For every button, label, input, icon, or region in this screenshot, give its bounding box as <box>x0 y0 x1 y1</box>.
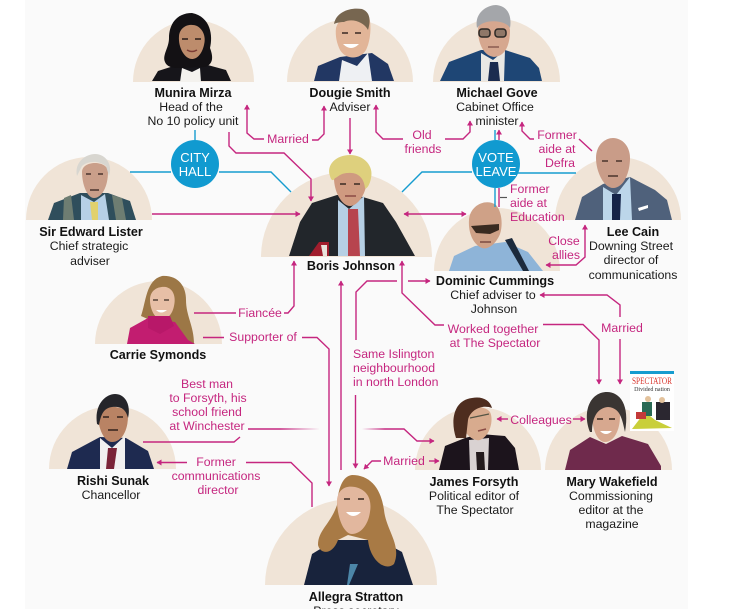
portrait <box>439 397 519 470</box>
connector: Former aide at Defra <box>522 122 592 170</box>
role: Cabinet Office <box>456 100 534 114</box>
cover bar <box>630 371 674 374</box>
portrait <box>440 5 542 81</box>
label line 3: Education <box>510 210 565 224</box>
person: Munira Mirza <box>133 13 254 128</box>
label line 2: communications <box>172 469 260 483</box>
connector: Lister to Johnson <box>152 213 300 215</box>
role: Adviser <box>329 100 371 114</box>
role line 2: adviser <box>70 254 110 268</box>
label line 2: at The Spectator <box>450 336 540 350</box>
label line 3: director <box>197 483 239 497</box>
connector: Stratton married Forsyth <box>364 454 439 469</box>
person: Mary Wakefield <box>545 392 672 531</box>
name: Boris Johnson <box>307 259 395 273</box>
connector: Mirza to Johnson <box>229 132 311 201</box>
label: Married <box>267 132 309 146</box>
person: Lee Cain <box>555 138 681 282</box>
person: Sir Edward Lister <box>26 154 152 268</box>
cover cartoon <box>632 396 672 429</box>
backdrop <box>133 20 254 82</box>
portrait <box>127 276 195 344</box>
group: Vote Leave connectors <box>402 130 576 207</box>
role: Downing Street <box>589 239 674 253</box>
person: Allegra Stratton <box>265 475 437 609</box>
role line 2: Johnson <box>471 302 517 316</box>
role line 2: editor at the <box>579 503 644 517</box>
connector: Same Islington neighbourhood <box>353 281 439 468</box>
cover page <box>630 371 674 431</box>
role line 2: minister <box>475 114 519 128</box>
backdrop <box>95 281 222 344</box>
person: Dougie Smith <box>287 9 413 114</box>
connector: Stratton to Johnson <box>340 281 342 470</box>
label line 3: in north London <box>353 375 439 389</box>
name: Rishi Sunak <box>77 474 150 488</box>
backdrop <box>49 406 176 469</box>
label line 4: at Winchester <box>169 419 245 433</box>
backdrop <box>545 407 672 470</box>
label: Old <box>412 128 432 142</box>
portrait <box>575 138 672 220</box>
label line 3: Defra <box>545 156 575 170</box>
name: James Forsyth <box>430 475 518 489</box>
role: Head of the <box>159 100 223 114</box>
portrait <box>304 475 413 585</box>
name: Allegra Stratton <box>309 590 403 604</box>
name: Michael Gove <box>456 86 538 100</box>
badge: Vote Leave <box>472 140 520 188</box>
person: James Forsyth <box>415 397 541 517</box>
backdrop <box>555 157 681 220</box>
portrait <box>449 202 543 271</box>
label: Married <box>383 454 425 468</box>
portrait <box>48 154 136 220</box>
connector: Colleagues <box>497 413 585 427</box>
portrait <box>289 155 415 256</box>
label: Former <box>196 455 236 469</box>
label line 2: aide at <box>510 196 548 210</box>
connector: Johnson and Cummings <box>404 213 466 215</box>
label line 3: school friend <box>172 405 242 419</box>
name: Sir Edward Lister <box>39 225 143 239</box>
person: Rishi Sunak <box>49 394 176 502</box>
label: Former <box>510 182 550 196</box>
role: Chief strategic <box>50 239 128 253</box>
connector: Old friends <box>376 105 470 156</box>
person: Dominic Cummings <box>434 202 560 316</box>
label line 2: to Forsyth, his <box>169 391 247 405</box>
role line 3: magazine <box>585 517 639 531</box>
label: Supporter of <box>229 330 297 344</box>
label line 2: allies <box>552 248 580 262</box>
role: Political editor of <box>429 489 520 503</box>
name: Mary Wakefield <box>566 475 658 489</box>
badge line 2: HALL <box>179 164 211 179</box>
connector: Best man <box>143 377 434 442</box>
backdrop <box>287 19 413 82</box>
label: Colleagues <box>510 413 572 427</box>
backdrop <box>261 172 432 257</box>
role: Commissioning <box>569 489 653 503</box>
cover title: SPECTATOR <box>632 377 673 387</box>
connector: Former communications director <box>157 455 312 507</box>
label line 2: friends <box>405 142 441 156</box>
label: Married <box>601 321 643 335</box>
backdrop <box>415 407 541 470</box>
connector: Fiancee <box>194 261 294 320</box>
connector: Smith to Johnson <box>349 118 351 154</box>
role line 2: director of <box>604 253 659 267</box>
label line 2: neighbourhood <box>353 361 435 375</box>
portrait <box>314 9 394 81</box>
connector: Mirza married Smith <box>247 105 324 146</box>
label: Best man <box>181 377 233 391</box>
backdrop <box>433 19 560 82</box>
cover headline: Divided nation <box>634 387 670 393</box>
backdrop <box>265 499 437 585</box>
badge line 1: CITY <box>180 150 210 165</box>
connector: Former aide at Education <box>499 130 565 224</box>
role: Chancellor <box>82 488 140 502</box>
role line 3: communications <box>589 268 677 282</box>
name: Dougie Smith <box>309 86 391 100</box>
group: City Hall connectors <box>130 130 291 192</box>
connector: Supporter of <box>203 330 329 486</box>
connector: Cummings married Wakefield <box>540 295 643 384</box>
backdrop <box>434 208 560 271</box>
label: Former <box>537 128 577 142</box>
badge line 1: VOTE <box>478 150 514 165</box>
label: Close <box>548 234 580 248</box>
label: Same Islington <box>353 347 435 361</box>
role line 2: The Spectator <box>436 503 514 517</box>
portrait <box>67 394 154 469</box>
connector: Close allies <box>546 225 585 265</box>
person: Boris Johnson <box>261 155 432 273</box>
backdrop <box>26 157 152 220</box>
badge: City Hall <box>171 140 219 188</box>
role line 2: No 10 policy unit <box>148 114 239 128</box>
label line 2: aide at <box>539 142 576 156</box>
badge line 2: LEAVE <box>476 164 517 179</box>
name: Carrie Symonds <box>110 348 206 362</box>
name: Munira Mirza <box>155 86 232 100</box>
person: Carrie Symonds <box>95 276 222 362</box>
name: Lee Cain <box>607 225 659 239</box>
label: Worked together <box>448 322 538 336</box>
portrait <box>152 13 231 82</box>
person: Michael Gove <box>433 5 560 128</box>
name: Dominic Cummings <box>436 274 554 288</box>
role: Chief adviser to <box>450 288 536 302</box>
connector: Worked together at The Spectator <box>402 261 599 384</box>
portrait <box>565 392 661 470</box>
label: Fiancée <box>238 306 282 320</box>
magazine cover: The Spectator <box>630 371 674 431</box>
